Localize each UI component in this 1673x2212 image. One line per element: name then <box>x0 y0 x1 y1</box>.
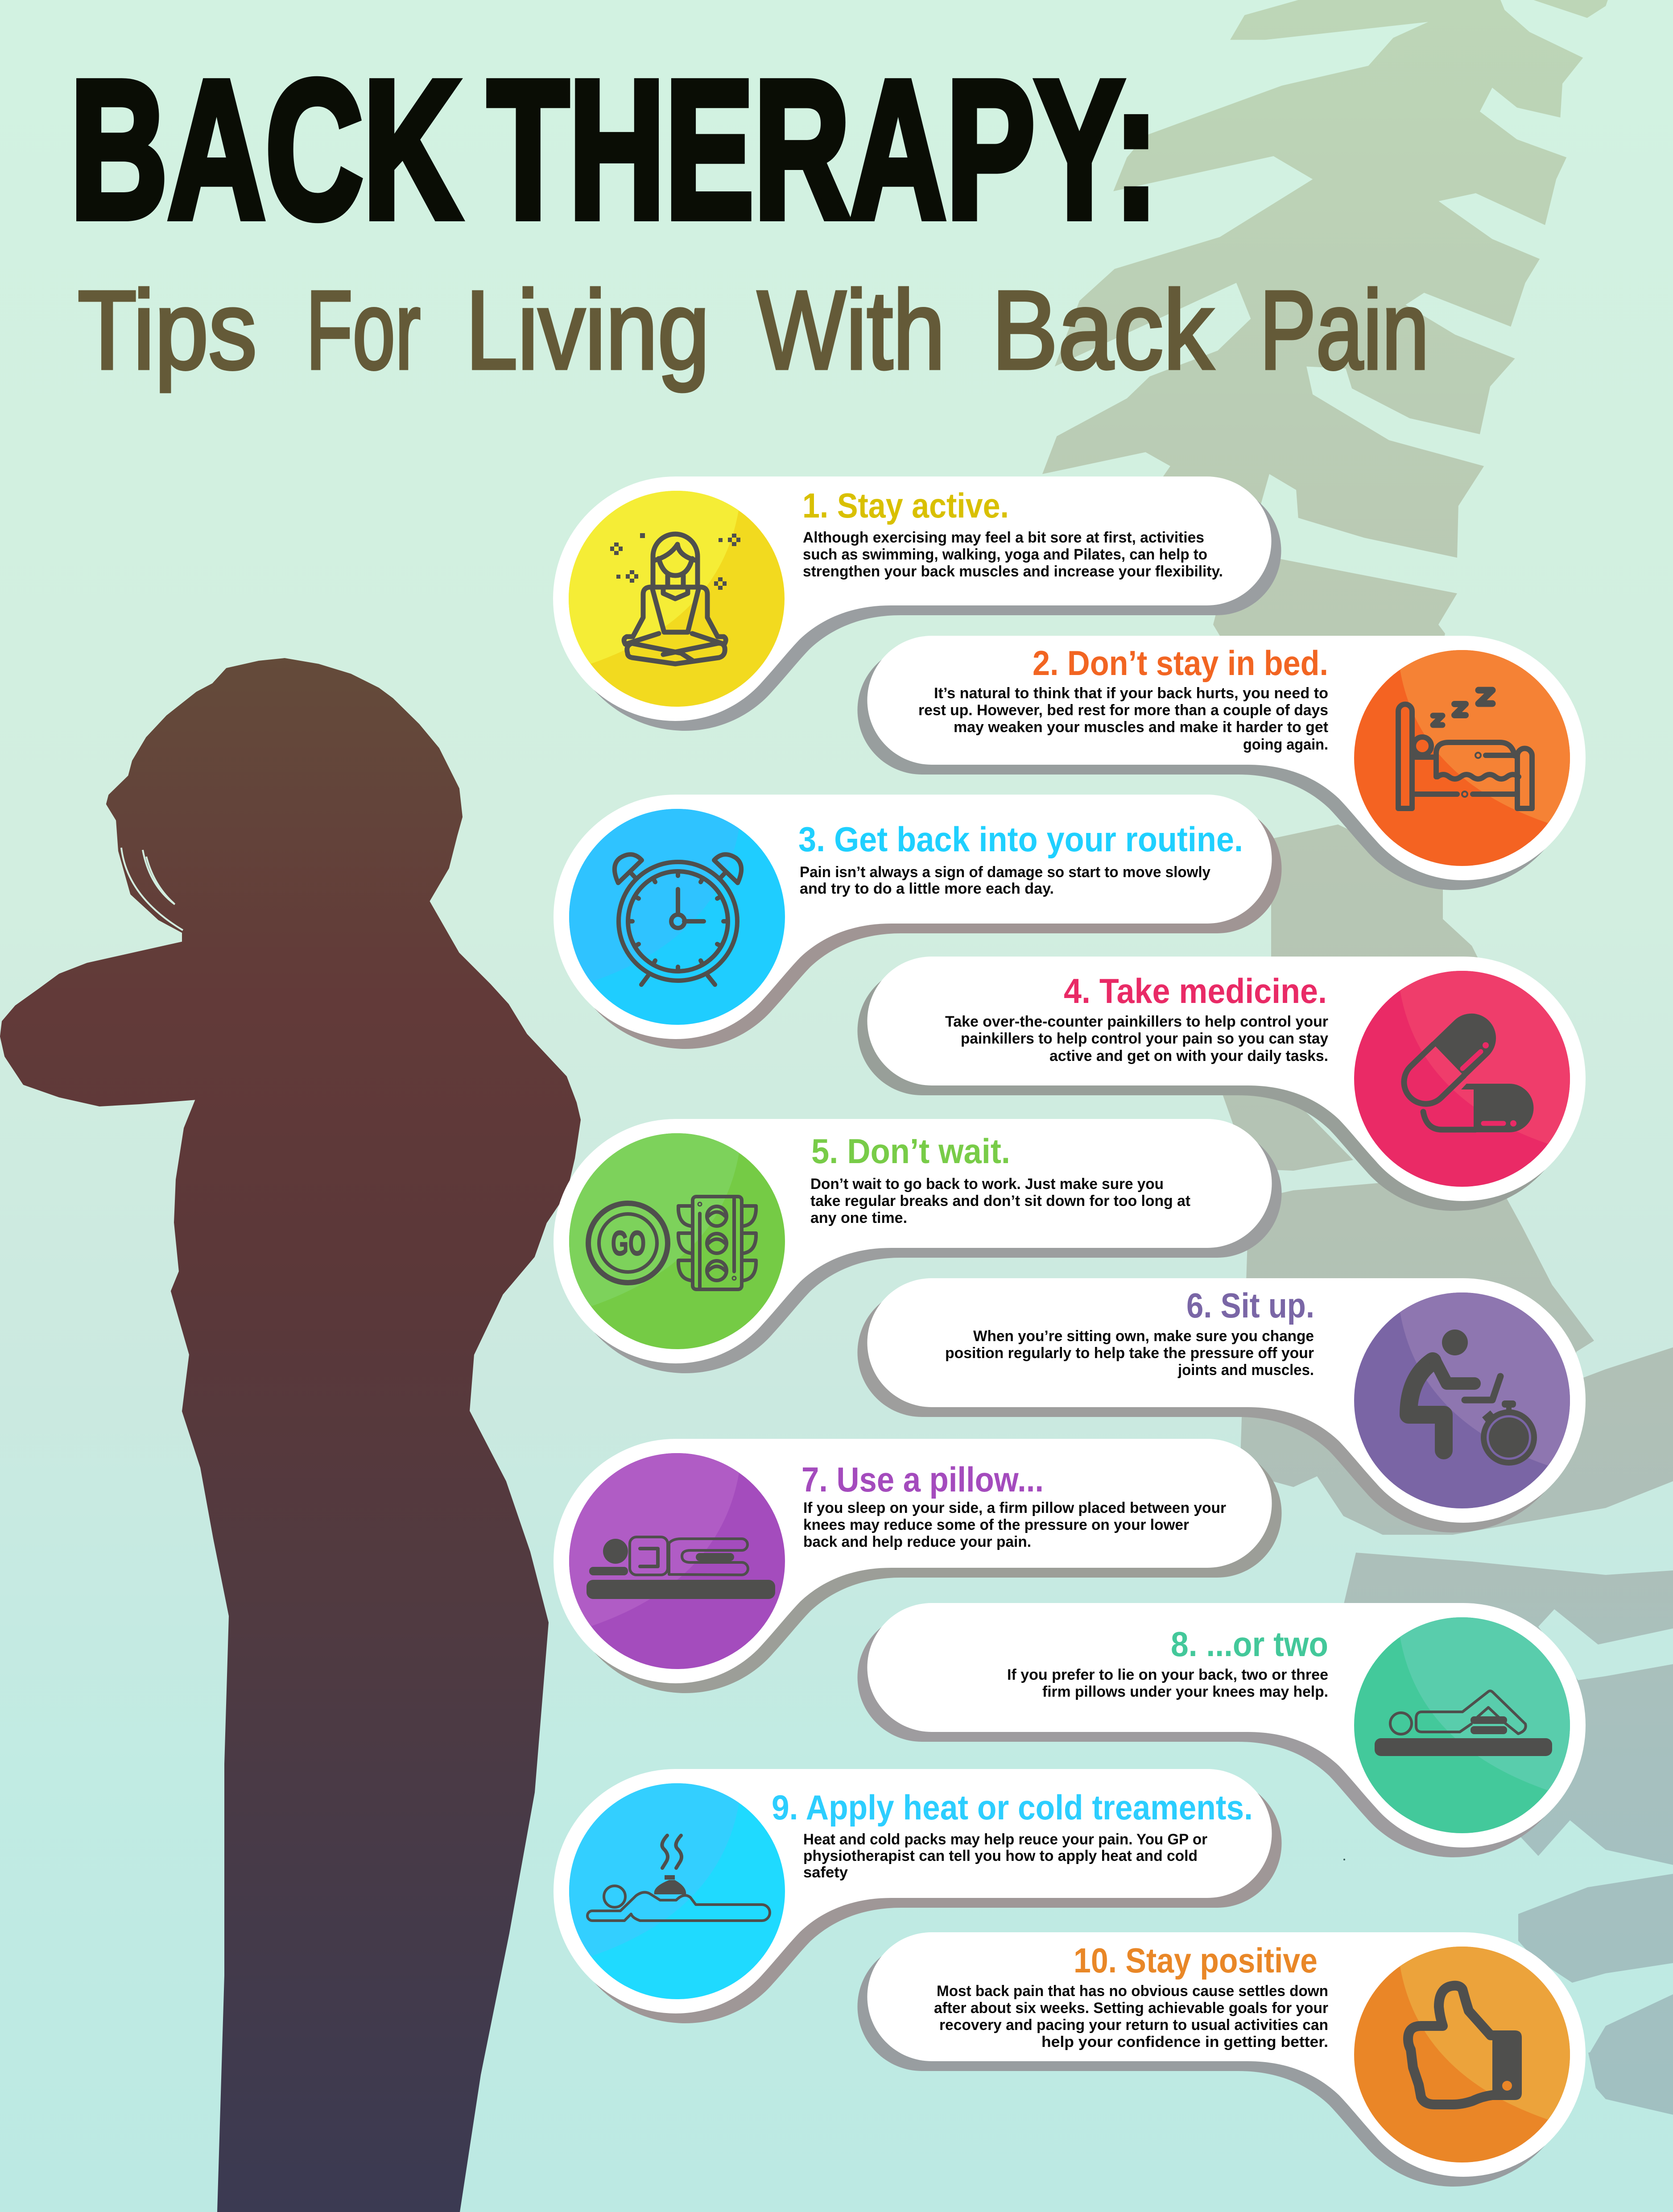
body 7 <box>803 1500 1226 1550</box>
heading 5: 5. Don’t wait. <box>811 1131 1010 1171</box>
body 8: If you prefer to lie on your back, two or three <box>1007 1666 1328 1683</box>
tip 1: stay active <box>553 476 1281 731</box>
icon: alarm clock <box>615 854 741 985</box>
tip 9: apply heat or cold treatments <box>554 1769 1282 2023</box>
body 10: Most back pain that has no obvious cause settles down <box>937 1983 1328 2000</box>
body 4: painkillers to help control your pain so you can stay <box>961 1030 1328 1047</box>
icon: go sign and traffic light: GO <box>611 1223 646 1263</box>
body 4: Take over-the-counter painkillers to help control your <box>945 1013 1328 1030</box>
subtitle: With <box>757 268 945 392</box>
body 3: Pain isn’t always a sign of damage so start to move slowly <box>800 864 1210 881</box>
body 2 <box>918 685 1328 753</box>
body 9: Heat and cold packs may help reuce your pain. You GP or <box>803 1831 1207 1848</box>
tip 6: sit up <box>857 1278 1586 1533</box>
heading 9: 9. Apply heat or cold treaments. <box>772 1788 1253 1827</box>
body 6: joints and muscles. <box>1177 1362 1314 1379</box>
heading 1: 1. Stay active. <box>802 486 1009 525</box>
body 6: position regularly to help take the pressure off your <box>945 1345 1314 1362</box>
icon: go sign and traffic light <box>588 1197 756 1289</box>
body 3 <box>800 864 1210 897</box>
icon: person lying down with hot pack <box>587 1835 770 1921</box>
body 1: strengthen your back muscles and increase your flexibility. <box>803 563 1223 580</box>
heading 2: 2. Don’t stay in bed. <box>1033 643 1328 683</box>
heading 3: 3. Get back into your routine. <box>798 820 1243 859</box>
heading 10: 10. Stay positive <box>1074 1941 1318 1980</box>
body 3: and try to do a little more each day. <box>800 880 1054 897</box>
icon: bed with sleeper <box>1398 690 1532 808</box>
tip 3: get back into your routine <box>554 795 1282 1049</box>
heading 4: 4. Take medicine. <box>1064 971 1327 1011</box>
body 10: recovery and pacing your return to usual activities can <box>939 2017 1328 2034</box>
body 6: When you’re sitting own, make sure you change <box>973 1328 1314 1345</box>
title <box>70 40 1158 259</box>
title: BACK <box>70 40 461 259</box>
subtitle: Back <box>991 268 1214 392</box>
heading 7: 7. Use a pillow... <box>801 1460 1044 1499</box>
tip 5: don't wait <box>554 1119 1282 1373</box>
body 8: firm pillows under your knees may help. <box>1042 1683 1328 1700</box>
tip 8: or two <box>857 1603 1586 1857</box>
body 2: going again. <box>1243 736 1328 753</box>
body 2: It’s natural to think that if your back hurts, you need to <box>934 685 1328 702</box>
body 1 <box>803 529 1223 580</box>
subtitle <box>78 268 1429 392</box>
body 2: rest up. However, bed rest for more than a couple of days <box>918 702 1328 719</box>
body 5: take regular breaks and don’t sit down for too long at <box>810 1193 1190 1210</box>
heading 6: 6. Sit up. <box>1186 1286 1314 1325</box>
body 5: any one time. <box>810 1210 907 1226</box>
tip 7: use a pillow <box>554 1439 1282 1693</box>
body 7: If you sleep on your side, a firm pillow placed between your <box>803 1500 1226 1516</box>
icon: seated person with laptop and stopwatch <box>1409 1330 1537 1466</box>
title: THERAPY: <box>487 40 1158 259</box>
body 10: after about six weeks. Setting achievable goals for your <box>934 2000 1328 2017</box>
subtitle: Living <box>466 268 710 392</box>
tip 4: take medicine <box>857 957 1586 1211</box>
body 1: such as swimming, walking, yoga and Pilates, can help to <box>803 546 1207 563</box>
subtitle: Tips <box>78 268 257 392</box>
icon: capsules <box>1393 1003 1533 1132</box>
tip 10: stay positive <box>857 1932 1586 2187</box>
body 9: safety <box>803 1864 848 1881</box>
tip 2: don't stay in bed <box>857 636 1586 890</box>
hair strands <box>121 848 183 930</box>
silhouette of woman holding her back <box>1 659 579 2212</box>
icon: person lying on side with pillow <box>587 1537 775 1599</box>
body 5 <box>810 1176 1190 1226</box>
body 9: physiotherapist can tell you how to apply heat and cold <box>803 1847 1198 1864</box>
body 10: help your confidence in getting better. <box>1041 2034 1328 2050</box>
icon: thumbs up <box>1408 1986 1522 2104</box>
body 7: back and help reduce your pain. <box>803 1533 1031 1550</box>
body 9 <box>803 1831 1207 1881</box>
subtitle: For <box>306 268 421 392</box>
spine shadow graphic <box>1042 0 1673 2115</box>
body 7: knees may reduce some of the pressure on your lower <box>803 1516 1189 1533</box>
heading 8: 8. ...or two <box>1171 1624 1328 1664</box>
icon: person lying on back with pillows under knees <box>1375 1691 1552 1756</box>
body 10 <box>934 1983 1328 2050</box>
body 4: active and get on with your daily tasks. <box>1049 1048 1328 1065</box>
body 5: Don’t wait to go back to work. Just make sure you <box>810 1176 1164 1193</box>
body 1: Although exercising may feel a bit sore at first, activities <box>803 529 1204 546</box>
body 4 <box>945 1013 1328 1065</box>
body 6 <box>945 1328 1314 1379</box>
subtitle: Pain <box>1260 268 1429 392</box>
body 8 <box>1007 1666 1328 1700</box>
icon: meditating woman <box>610 533 740 664</box>
body 2: may weaken your muscles and make it harder to get <box>954 719 1328 736</box>
